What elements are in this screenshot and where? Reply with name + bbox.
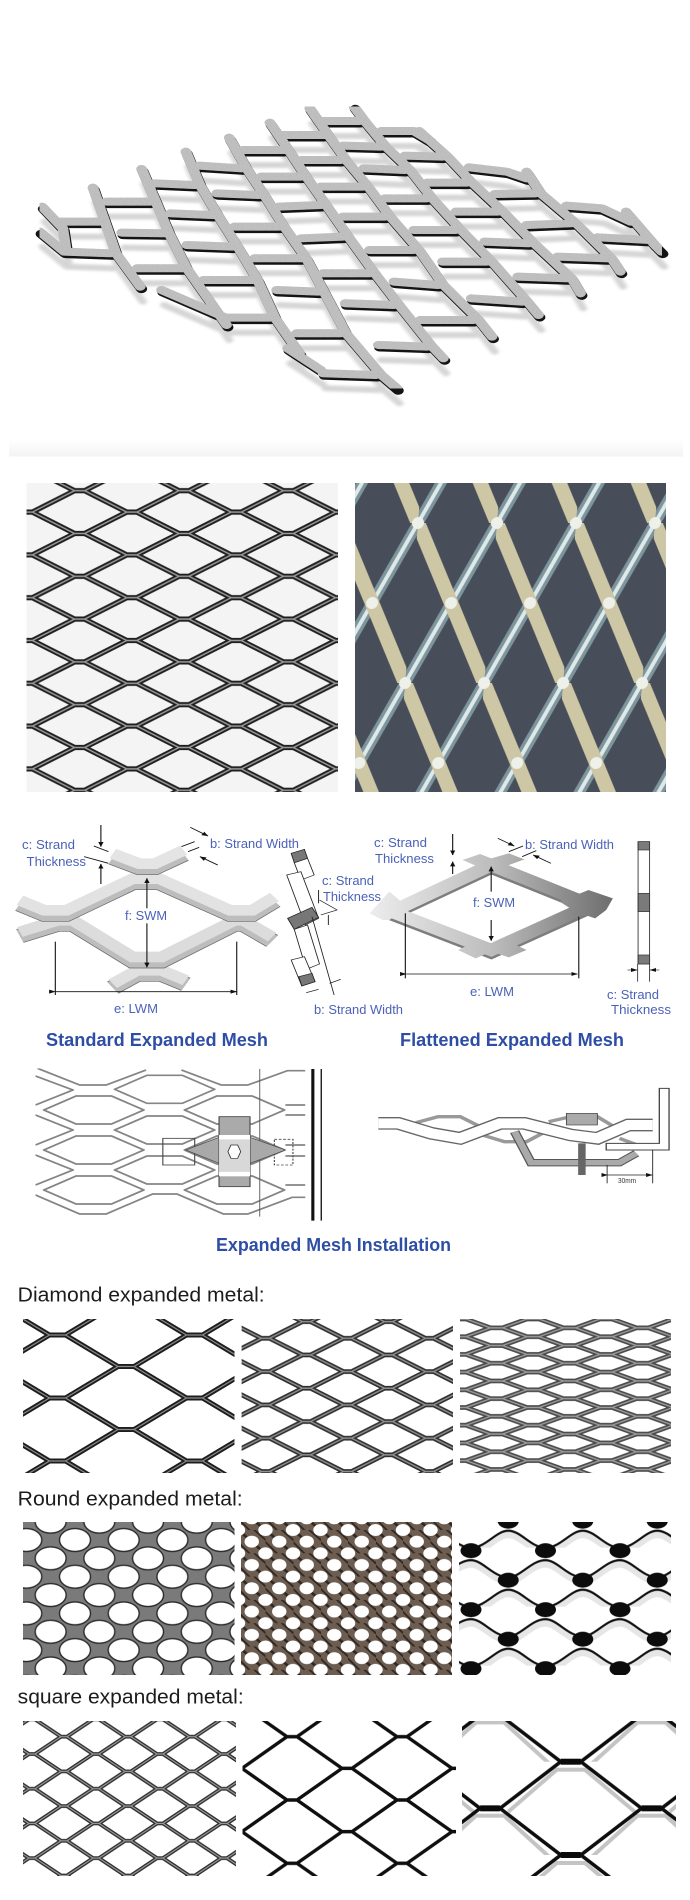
heading: round expanded metal: Round expanded metal: [18, 1488, 243, 1510]
diagram: installation front view [35, 1068, 321, 1221]
diagram: installation cross-section [378, 1088, 669, 1183]
label: c strand thickness, flattened section: Thickness [611, 1002, 672, 1017]
swatch: round grey [23, 1522, 234, 1675]
diagram: flattened mesh side section [627, 842, 659, 982]
swatch: square medium [242, 1721, 456, 1876]
heading: diamond expanded metal: Diamond expanded metal: [18, 1284, 265, 1306]
label: e LWM, standard: e: LWM [114, 1001, 158, 1016]
hero photo: expanded metal sheet [9, 107, 683, 456]
swatch: diamond medium [242, 1319, 453, 1473]
swatch: square large [462, 1721, 676, 1876]
heading: expanded mesh installation: Expanded Mesh Installation [216, 1235, 451, 1255]
label: e LWM, flattened: e: LWM [470, 984, 514, 999]
label: b strand width, flattened: b: Strand Width [525, 837, 614, 852]
label: c strand thickness, standard section: c: Strand [322, 873, 374, 888]
label: c strand thickness, flattened: Thickness [375, 851, 434, 866]
swatch: round bronze [241, 1522, 452, 1675]
diagram: flattened expanded mesh [369, 834, 613, 978]
swatch: diamond large [23, 1319, 234, 1473]
swatch: diamond small [460, 1319, 671, 1473]
label: f SWM, flattened: f: SWM [473, 895, 515, 910]
heading: square expanded metal: square expanded metal: [18, 1686, 244, 1708]
diagram: standard expanded mesh [20, 825, 274, 995]
swatch: square small [23, 1721, 236, 1876]
label: c strand thickness, standard: Thickness [26, 854, 86, 869]
label: c strand thickness, flattened: c: Strand [374, 835, 427, 850]
photo: black and white diamond mesh [26, 483, 338, 792]
label: c strand thickness, flattened section: c: Strand [607, 987, 659, 1002]
label: 30mm dimension: 30mm [618, 1178, 636, 1185]
label: c strand thickness, standard: c: Strand [22, 837, 75, 852]
label: b strand width, standard: b: Strand Width [210, 836, 299, 851]
photo: galvanized mesh on dark background [355, 483, 666, 792]
label: f SWM, standard: f: SWM [125, 908, 167, 923]
label: c strand thickness, standard section: Thickness [323, 889, 381, 904]
heading: standard expanded mesh: Standard Expanded Mesh [46, 1030, 268, 1050]
heading: flattened expanded mesh: Flattened Expanded Mesh [400, 1030, 624, 1050]
diagram: standard mesh side section [287, 849, 341, 995]
swatch: round large [459, 1522, 671, 1675]
label: b strand width, standard section: b: Strand Width [314, 1002, 403, 1017]
